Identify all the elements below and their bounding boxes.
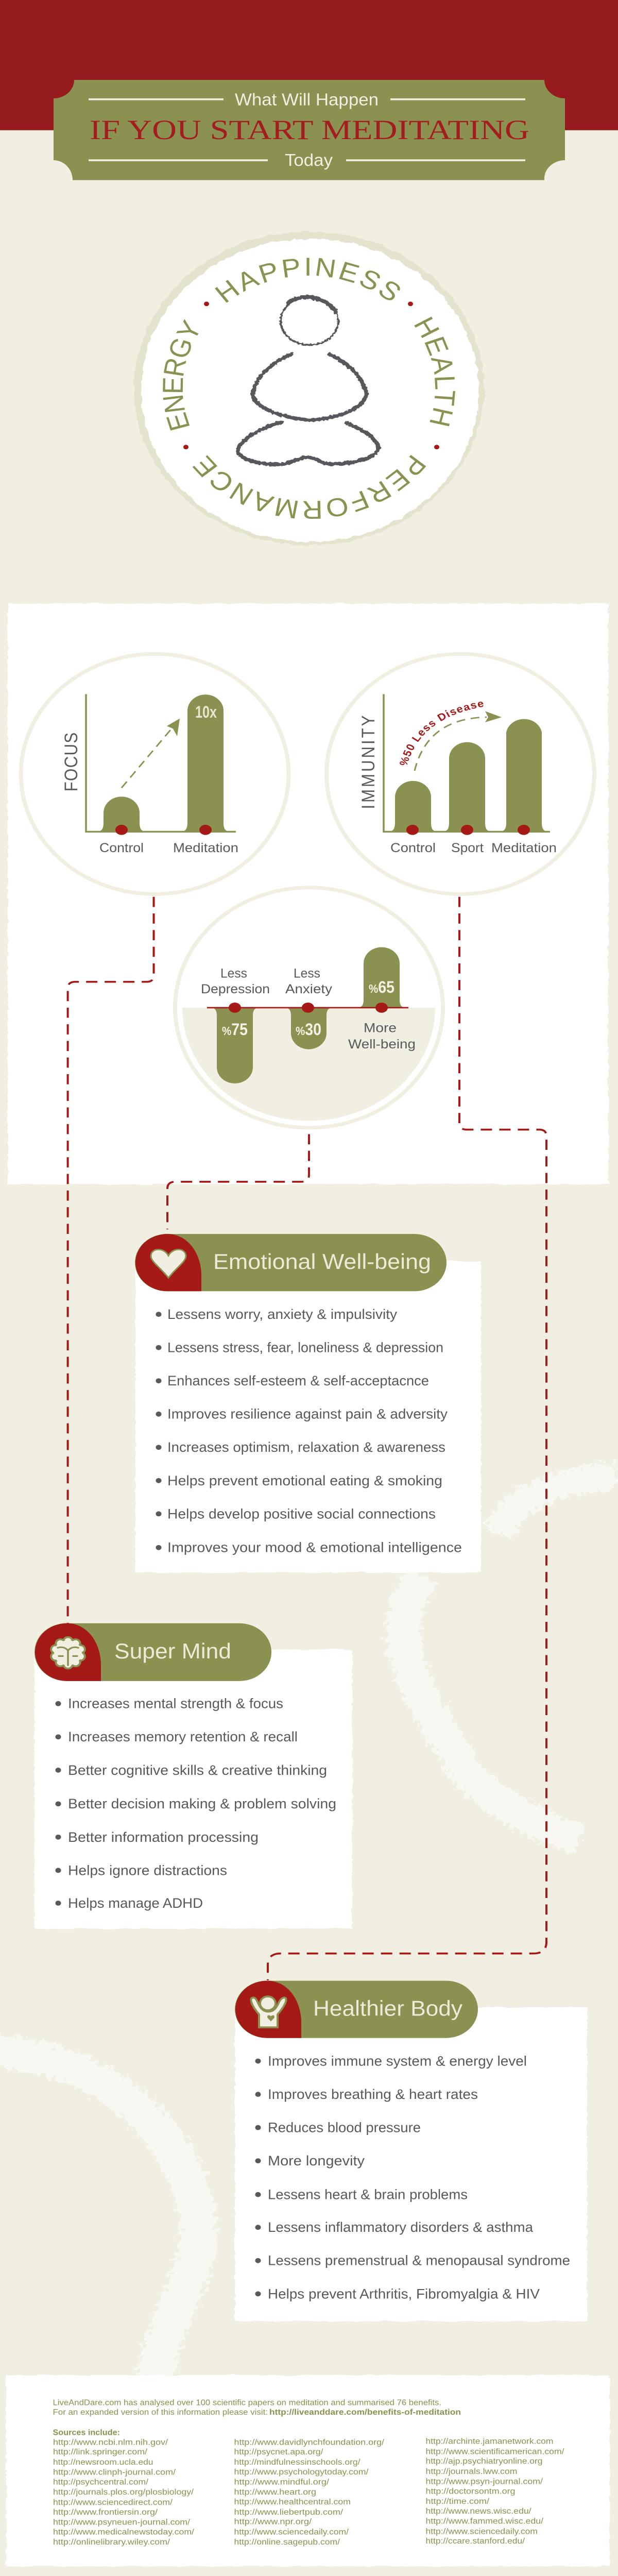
label: control: Control [99,840,144,855]
list: emotional benefits: Improves your mood & emotional intelligence [167,1540,462,1555]
title banner [54,80,565,180]
list: body benefits: Helps prevent Arthritis, Fibromyalgia & HIV [268,2286,540,2302]
list: body benefits: Reduces blood pressure [268,2120,421,2136]
top red band [0,0,618,130]
list: body benefits: Improves immune system & energy level [268,2054,527,2069]
header pill: super mind [35,1623,271,1681]
label: control: Control [390,840,436,855]
arrow: curved [415,711,502,771]
panel: healthier body [235,1981,587,2321]
footer intro text: For an expanded version of this information please visit: [53,2408,268,2417]
chart: emotional well-being [175,888,443,1128]
connector: well-being to emotional header [167,1134,309,1229]
bar: sport [441,742,493,832]
sources column 3: http://www.news.wisc.edu/ [425,2506,531,2516]
sources column 1 [53,2437,194,2547]
header teardrop [135,1234,201,1291]
list: mind benefits: Helps manage ADHD [68,1895,203,1911]
sources column 3: http://www.sciencedaily.com [425,2527,538,2536]
sources column 2: http://online.sagepub.com/ [234,2537,340,2547]
sources heading: Sources include: [53,2428,120,2437]
banner line: today: Today [285,151,333,170]
sources column 3: http://ccare.stanford.edu/ [425,2536,525,2546]
bar: more well-being [357,947,406,1008]
bar dots [115,825,212,835]
main title: IF YOU START MEDITATING [90,115,529,145]
label: less anxiety: Less [294,966,320,980]
sources column 3: http://archinte.jamanetwork.com [425,2436,553,2446]
list: emotional benefits: Increases optimism, relaxation & awareness [167,1440,445,1455]
value: 75 percent: %75 [222,1020,248,1039]
panel: emotional well-being [135,1234,481,1572]
value: 30 percent: %30 [296,1020,321,1039]
callout: 50 percent less disease: %50 Less Disease [400,702,484,765]
icon: brain [51,1637,85,1669]
bar: meditation [499,719,550,832]
heading: emotional well-being: Emotional Well-being [213,1250,431,1274]
label: less anxiety: Anxiety [285,981,333,996]
list: emotional benefits: Improves resilience against pain & adversity [167,1406,448,1422]
sources column 2: http://www.npr.org/ [234,2517,312,2526]
value: 65 percent: %65 [369,978,394,997]
sources column 3 [425,2436,564,2546]
sources column 2: http://www.liebertpub.com/ [234,2507,343,2517]
sources column 2: http://mindfulnessinschools.org/ [234,2458,360,2467]
banner line: what will happen: What Will Happen [235,90,379,109]
value: 10x: 10x [195,703,217,722]
list: body benefits: More longevity [268,2154,365,2169]
bar: less anxiety [284,1008,333,1049]
label: less depression [201,966,270,996]
sources column 1: http://www.sciencedirect.com/ [53,2498,173,2507]
sources column 2: http://www.davidlynchfoundation.org/ [234,2437,384,2447]
sources column 2: http://www.mindful.org/ [234,2477,329,2486]
sources column 1: http://www.frontiersin.org/ [53,2507,158,2517]
list: emotional benefits: Lessens stress, fear, loneliness & depression [167,1340,443,1355]
bar dots [229,1003,388,1013]
footer intro text [53,2398,461,2417]
list: mind benefits: Increases mental strength & focus [68,1696,283,1711]
panel: study charts [8,604,608,1184]
list: body benefits [255,2054,570,2302]
label: more well-being [348,1021,416,1051]
immunity axis label: IMMUNITY [358,715,379,809]
panel: super mind [35,1623,352,1928]
emblem word: happiness: HAPPINESS [215,258,400,303]
sources column 2: http://www.healthcentral.com [234,2497,351,2506]
sources column 1: http://www.clinph-journal.com/ [53,2468,176,2477]
label: more well-being: Well-being [348,1037,416,1051]
sources column 3: http://www.fammed.wisc.edu/ [425,2517,543,2526]
list: emotional benefits: Enhances self-esteem & self-acceptacnce [167,1374,429,1389]
list: mind benefits: Increases memory retention & recall [68,1730,298,1745]
bar: control [96,796,147,832]
list: body benefits: Lessens premenstrual & menopausal syndrome [268,2253,570,2268]
list: mind benefits [56,1696,336,1911]
sources column 1: http://link.springer.com/ [53,2447,147,2456]
sources column 1: http://www.psyneuen-journal.com/ [53,2517,190,2527]
list: mind benefits: Better decision making & problem solving [68,1797,336,1812]
sources column 3: http://time.com/ [425,2497,489,2506]
emblem word: health: HEALTH [414,316,455,427]
sources column 2: http://www.sciencedaily.com/ [234,2527,349,2536]
list: emotional benefits: Helps prevent emotional eating & smoking [167,1473,442,1488]
bar: meditation [180,694,231,832]
chart: focus [21,654,288,894]
list: body benefits: Lessens inflammatory disorders & asthma [268,2220,533,2235]
sources column 2: http://www.heart.org [234,2487,316,2497]
benefits emblem [133,231,486,546]
sources column 3: http://doctorsontm.org [425,2486,516,2496]
brush stroke texture: left [0,2050,198,2383]
sources column 2: http://www.psychologytoday.com/ [234,2467,369,2477]
connector: immunity to healthier body [268,897,546,1980]
header teardrop [235,1981,301,2038]
brush stroke texture: right [403,1476,615,1840]
sources column 3: http://journals.lww.com [425,2467,517,2476]
label: meditation: Meditation [173,840,238,855]
sources column 1: http://www.ncbi.nlm.nih.gov/ [53,2437,168,2447]
label: more well-being: More [364,1021,397,1035]
footer intro text: http://liveanddare.com/benefits-of-meditation [269,2408,461,2417]
header pill: healthier body [235,1981,478,2038]
heading: super mind: Super Mind [114,1639,231,1663]
header pill: emotional [135,1234,447,1291]
list: mind benefits: Better cognitive skills & creative thinking [68,1762,327,1778]
icon: heart [151,1249,186,1278]
list: emotional benefits: Helps develop positive social connections [167,1506,436,1522]
list: mind benefits: Helps ignore distractions [68,1863,227,1878]
sources column 1: http://newsroom.ucla.edu [53,2458,153,2467]
sources column 3: http://www.psyn-journal.com/ [425,2477,543,2486]
bar dots [406,825,530,835]
sources column 1: http://onlinelibrary.wiley.com/ [53,2537,170,2547]
heading: healthier body: Healthier Body [313,1997,463,2021]
icon: person with raised arms [251,1996,286,2027]
emblem separator dots [183,301,439,449]
sources column 1: http://journals.plos.org/plosbiology/ [53,2487,194,2497]
chart: immunity [324,652,596,896]
emblem word: energy: ENERGY [163,319,199,431]
footer intro text: LiveAndDare.com has analysed over 100 scientific papers on meditation and summarised 76 benefits. [53,2398,441,2407]
list: body benefits: Improves breathing & heart rates [268,2087,478,2103]
connector: focus to super mind [68,897,153,1623]
panel: footer and sources [6,2375,610,2566]
label: less anxiety [285,966,333,996]
list: body benefits: Lessens heart & brain problems [268,2187,468,2202]
list: emotional benefits [156,1307,462,1555]
bar: control [387,781,439,832]
list: emotional benefits: Lessens worry, anxiety & impulsivity [167,1307,398,1323]
sources column 2: http://psycnet.apa.org/ [234,2447,323,2456]
icon: meditating figure [237,297,379,464]
label: less depression: Less [220,966,247,980]
label: less depression: Depression [201,981,270,996]
emblem word: performance: PERFORMANCE [193,455,426,519]
sources column 1: http://www.medicalnewstoday.com/ [53,2527,194,2536]
arrow: rising [122,719,180,788]
sources column 1: http://psychcentral.com/ [53,2477,148,2486]
label: sport: Sport [451,840,484,855]
bar: less depression [210,1008,260,1083]
sources column 2 [234,2437,384,2547]
label: meditation: Meditation [491,840,557,855]
focus axis label: FOCUS [61,733,81,791]
header teardrop [35,1623,101,1681]
sources column 3: http://ajp.psychiatryonline.org [425,2456,543,2466]
sources column 3: http://www.scientificamerican.com/ [425,2447,564,2456]
list: mind benefits: Better information processing [68,1829,259,1845]
